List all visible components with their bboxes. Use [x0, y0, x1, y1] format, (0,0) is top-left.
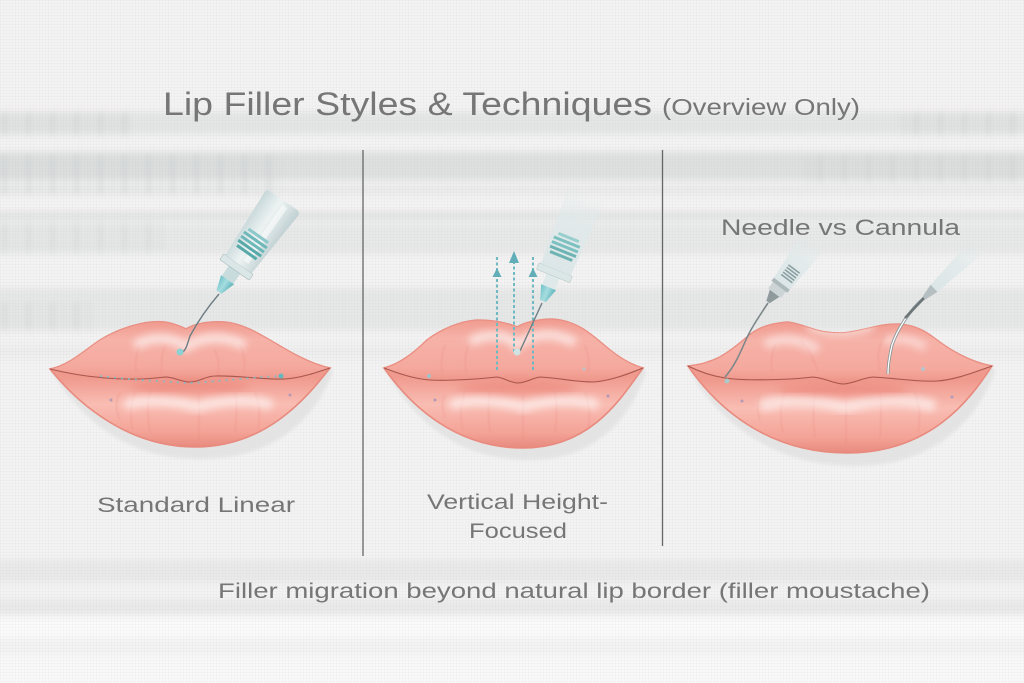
panel: needle vs cannula: [688, 215, 995, 466]
panel: vertical height-focused: [384, 187, 646, 543]
arrow: right vertical: [528, 255, 538, 370]
lips: needle vs cannula: [688, 322, 995, 466]
title: [163, 86, 860, 122]
syringe: [176, 189, 300, 356]
label: needle vs cannula: Needle vs Cannula: [721, 215, 961, 240]
syringe: [514, 187, 605, 356]
label: vertical height-focused: Vertical Height-: [427, 491, 608, 514]
title: (Overview Only): [662, 94, 860, 120]
arrow: centre vertical: [509, 251, 519, 352]
label: vertical height-focused: [427, 491, 608, 543]
panel: standard linear: [50, 189, 333, 517]
footer caption: Filler migration beyond natural lip border (filler moustache): [218, 580, 930, 603]
panel divider left: [362, 150, 364, 556]
label: standard linear: Standard Linear: [97, 494, 295, 517]
cannula: [888, 239, 984, 374]
panel divider right: [662, 150, 664, 546]
lips: standard linear: [50, 322, 333, 459]
arrow: left vertical: [492, 255, 502, 370]
title: Lip Filler Styles & Techniques: [163, 86, 652, 122]
needle: [724, 234, 824, 384]
label: vertical height-focused: Focused: [469, 520, 567, 543]
lips: vertical height-focused: [384, 319, 646, 460]
